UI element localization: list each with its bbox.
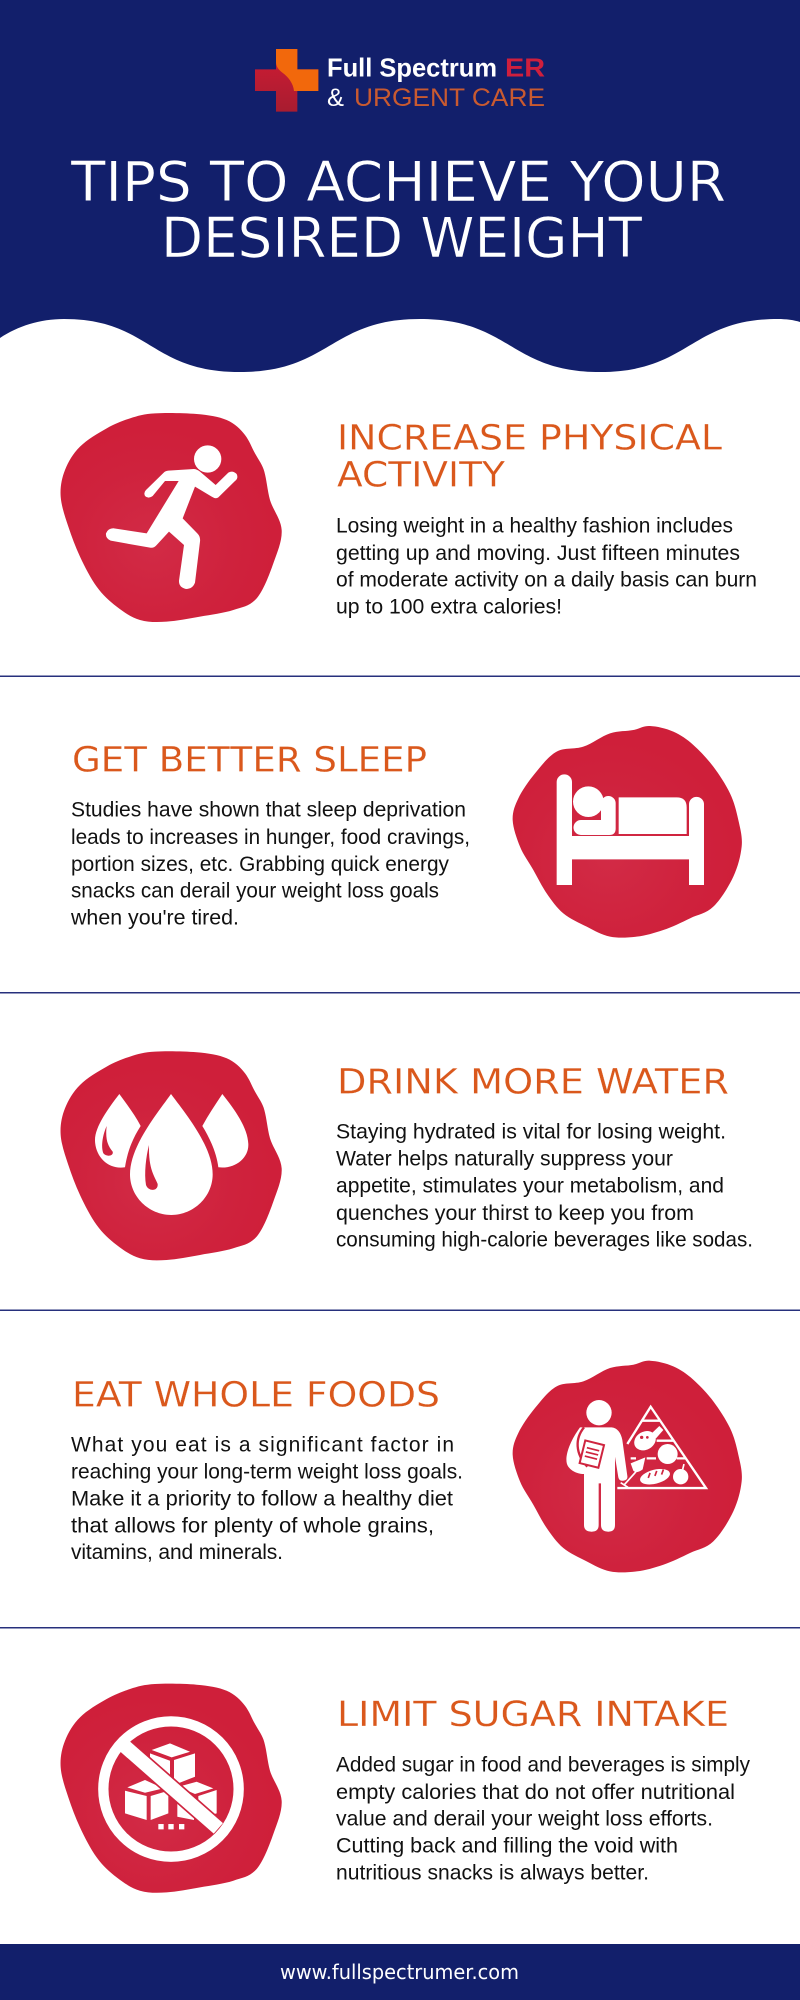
icon: water drops <box>61 1051 282 1260</box>
body text: leads to increases in hunger, food cravings, <box>71 826 470 849</box>
heading: LIMIT SUGAR INTAKE <box>337 1695 729 1735</box>
body text: empty calories that do not offer nutritional <box>336 1781 735 1804</box>
icon: medical cross <box>255 49 318 112</box>
heading <box>337 418 723 496</box>
body text <box>71 1433 463 1564</box>
body text: up to 100 extra calories! <box>336 595 562 618</box>
body text: consuming high-calorie beverages like sodas. <box>336 1229 753 1252</box>
heading: DRINK MORE WATER <box>337 1062 729 1102</box>
title: TIPS TO ACHIEVE YOUR <box>70 150 726 214</box>
icon: running person <box>61 413 282 622</box>
body text: quenches your thirst to keep you from <box>336 1202 694 1225</box>
body text: Make it a priority to follow a healthy diet <box>71 1488 453 1511</box>
body text: What you eat is a significant factor in <box>71 1433 454 1456</box>
title: DESIRED WEIGHT <box>161 206 642 270</box>
body text: snacks can derail your weight loss goals <box>71 880 439 903</box>
body text: reaching your long-term weight loss goals. <box>71 1461 463 1484</box>
icon: no sugar cubes <box>61 1684 282 1893</box>
body text: when you're tired. <box>70 906 239 929</box>
logo text: Full Spectrum: Full Spectrum <box>327 53 497 83</box>
heading: EAT WHOLE FOODS <box>72 1375 440 1415</box>
body text: of moderate activity on a daily basis can burn <box>336 569 757 592</box>
panel: limit sugar intake <box>61 1684 750 1893</box>
heading: ACTIVITY <box>337 456 506 496</box>
body text: Studies have shown that sleep deprivation <box>71 799 466 822</box>
body text <box>336 1754 750 1884</box>
panel: eat whole foods <box>71 1361 742 1572</box>
header band with wave <box>0 0 800 372</box>
body text: vitamins, and minerals. <box>71 1541 283 1564</box>
heading: GET BETTER SLEEP <box>72 741 427 781</box>
heading: INCREASE PHYSICAL <box>337 418 723 458</box>
website url: www.fullspectrumer.com <box>280 1960 519 1984</box>
panel: get better sleep <box>70 726 742 938</box>
body text: that allows for plenty of whole grains, <box>71 1514 434 1537</box>
body text: Staying hydrated is vital for losing weight. <box>336 1120 726 1143</box>
body text: nutritious snacks is always better. <box>336 1861 649 1884</box>
panel: increase physical activity <box>61 413 757 622</box>
body text: Water helps naturally suppress your <box>336 1148 673 1171</box>
footer band <box>0 1944 800 2000</box>
panel: drink more water <box>61 1051 753 1260</box>
body text: getting up and moving. Just fifteen minutes <box>336 542 740 565</box>
icon: person in bed <box>513 726 742 938</box>
logo text: ER: ER <box>505 53 545 83</box>
body text: Losing weight in a healthy fashion includes <box>336 515 733 538</box>
body text: Cutting back and filling the void with <box>336 1835 678 1858</box>
body text: portion sizes, etc. Grabbing quick energy <box>71 853 449 876</box>
body text <box>336 515 757 618</box>
body text <box>70 799 470 929</box>
body text: Added sugar in food and beverages is simply <box>336 1754 750 1777</box>
title <box>70 150 726 270</box>
logo text: ampersand: & <box>327 84 344 112</box>
body text <box>336 1120 753 1252</box>
logo text: URGENT CARE: URGENT CARE <box>354 84 545 112</box>
icon: person and food pyramid <box>513 1361 742 1572</box>
logo <box>255 49 545 112</box>
body text: appetite, stimulates your metabolism, and <box>336 1175 724 1198</box>
body text: value and derail your weight loss efforts. <box>336 1808 713 1831</box>
